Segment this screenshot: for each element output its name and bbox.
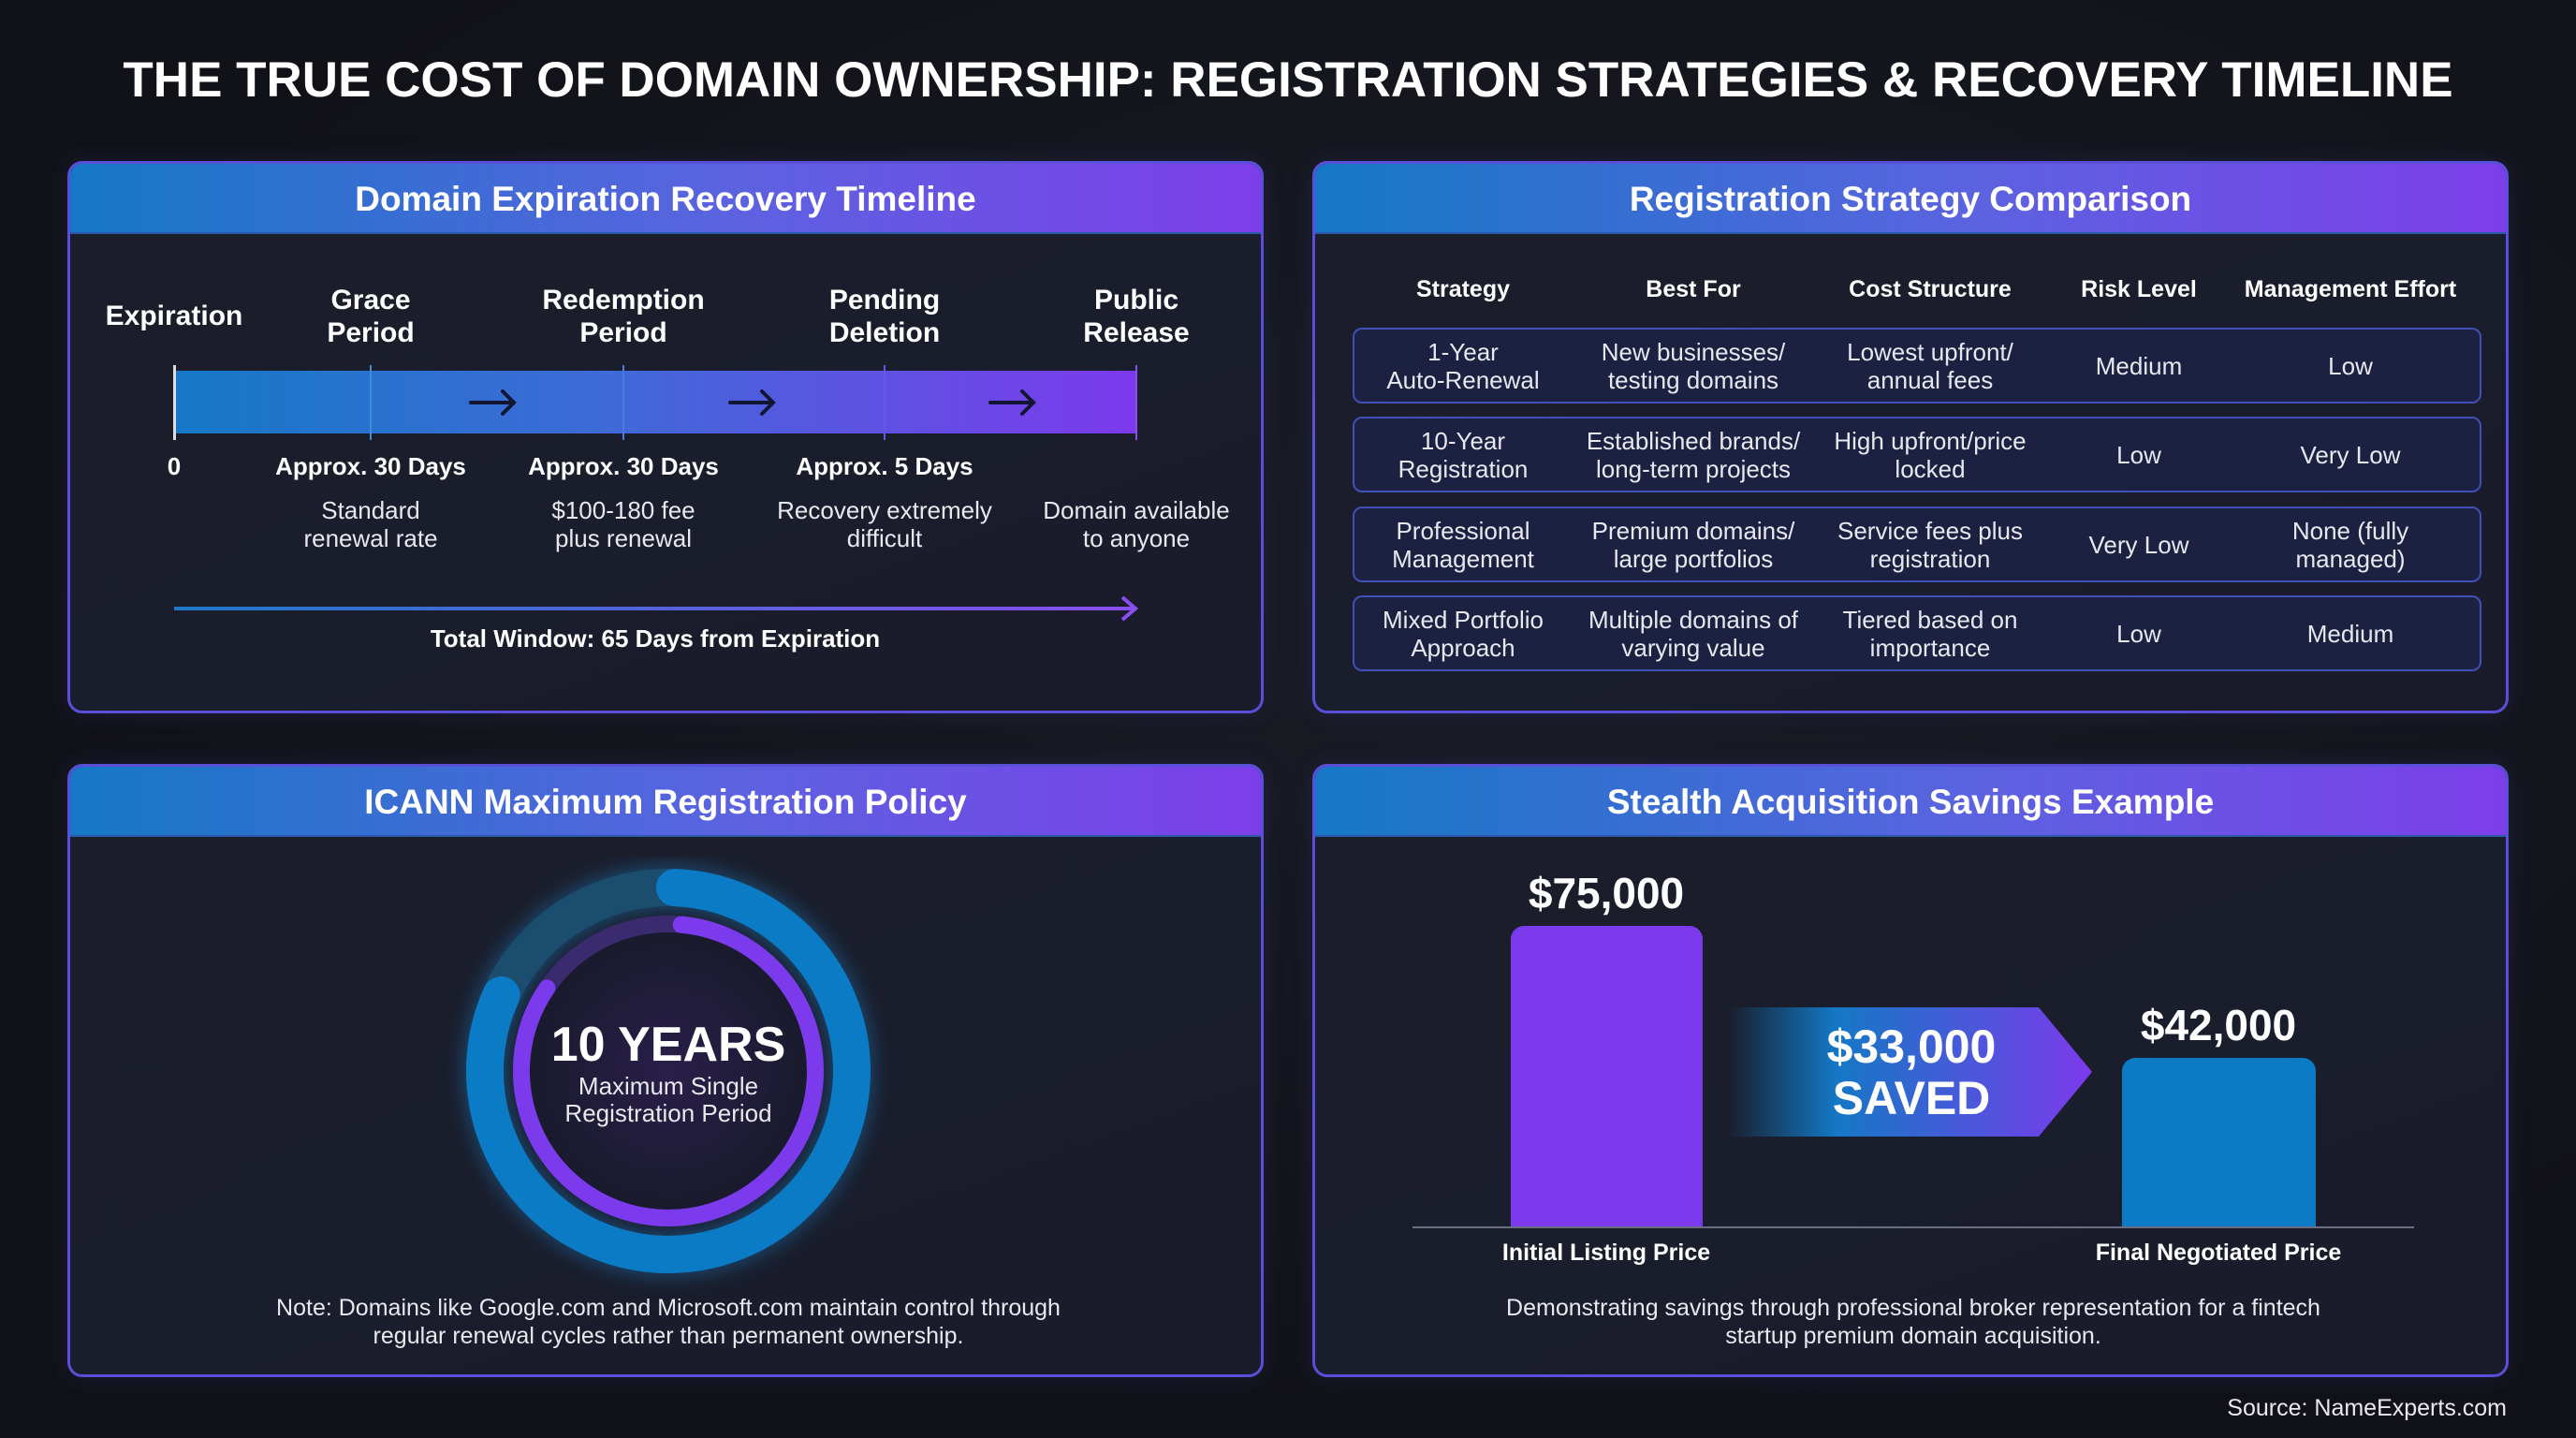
durations: Approx. 5 Days [796, 452, 973, 480]
donut center text: 10 YEARS [551, 1018, 785, 1072]
title: THE TRUE COST OF DOMAIN OWNERSHIP: REGISTRATION STRATEGIES & RECOVERY TIMELINE [123, 52, 2453, 108]
stage labels [106, 285, 1190, 348]
stage labels: Redemption [542, 285, 705, 315]
row: professional [1353, 506, 2481, 582]
heading: strategy [1315, 164, 2506, 234]
row: 10-year: locked [1895, 455, 1966, 483]
heading: timeline [70, 164, 1261, 234]
row: 10-year: Low [2116, 441, 2161, 469]
table header: Strategy [1416, 276, 1510, 302]
heading: ICANN: ICANN Maximum Registration Policy [364, 783, 967, 821]
tick marks [173, 365, 1137, 440]
row: 10-year: High upfront/price [1834, 427, 2027, 455]
row: 1-year: Medium [2096, 352, 2182, 380]
row: mixed: varying value [1621, 634, 1765, 662]
descriptions: difficult [847, 524, 922, 552]
bar labels [1502, 1240, 2341, 1266]
table header: Best For [1646, 276, 1741, 302]
row: professional: Service fees plus [1837, 517, 2023, 545]
row: 1-year: annual fees [1867, 366, 1993, 394]
heading: timeline: Domain Expiration Recovery Timeline [355, 180, 976, 218]
row: 1-year: 1-Year [1427, 338, 1499, 366]
durations: Approx. 30 Days [528, 452, 719, 480]
row: 10-year: Established brands/ [1587, 427, 1800, 455]
value: 42000: $42,000 [2141, 1001, 2296, 1049]
caption [1506, 1295, 2320, 1349]
panel: ICANN policy [67, 764, 1264, 1377]
total window text: Total Window: 65 Days from Expiration [431, 624, 880, 653]
row: 10-year: 10-Year [1421, 427, 1505, 455]
panel: stealth acquisition savings [1312, 764, 2509, 1377]
heading: savings [1315, 767, 2506, 837]
donut center text: Maximum Single [578, 1072, 758, 1100]
row: 1-year: Auto-Renewal [1386, 366, 1540, 394]
donut chart [453, 856, 884, 1286]
value: 75000: $75,000 [1529, 869, 1684, 917]
table header: Risk Level [2081, 276, 2197, 302]
timeline bar [174, 371, 1136, 433]
row: 10-year: Registration [1398, 455, 1528, 483]
row: mixed: Medium [2307, 620, 2393, 648]
stage labels: Period [579, 317, 667, 348]
descriptions: Recovery extremely [777, 496, 992, 524]
stage labels: Deletion [829, 317, 940, 348]
durations: 0 [168, 452, 181, 480]
heading: savings: Stealth Acquisition Savings Example [1607, 783, 2214, 821]
source: Source: NameExperts.com [2227, 1395, 2507, 1421]
heading: strategy: Registration Strategy Comparison [1630, 180, 2191, 218]
descriptions: to anyone [1083, 524, 1190, 552]
stage labels: Public [1094, 285, 1178, 315]
row: professional: large portfolios [1614, 545, 1773, 573]
bar labels: Final Negotiated Price [2096, 1240, 2341, 1266]
row: professional: Premium domains/ [1592, 517, 1794, 545]
descriptions: renewal rate [303, 524, 438, 552]
table header [1416, 276, 2456, 302]
row: professional: Management [1392, 545, 1534, 573]
stage labels: Expiration [106, 301, 242, 331]
savings text: $33,000 [1827, 1020, 1996, 1073]
row: 1-year [1353, 328, 2481, 404]
row: 1-year: testing domains [1608, 366, 1778, 394]
donut center text [551, 1018, 785, 1127]
note: Note: Domains like Google.com and Microsoft.com maintain control through [276, 1295, 1061, 1321]
stage labels: Pending [829, 285, 940, 315]
note [276, 1295, 1061, 1349]
row: professional: managed) [2295, 545, 2406, 573]
durations: Approx. 30 Days [275, 452, 466, 480]
donut center text: Registration Period [564, 1099, 772, 1127]
row: mixed: Low [2116, 620, 2161, 648]
row: 1-year: Lowest upfront/ [1847, 338, 2013, 366]
row: mixed: importance [1870, 634, 1990, 662]
caption: startup premium domain acquisition. [1725, 1323, 2101, 1349]
descriptions [303, 496, 1230, 552]
table header: Management Effort [2245, 276, 2456, 302]
savings text: SAVED [1833, 1072, 1990, 1124]
panel: registration strategy comparison [1312, 161, 2509, 713]
row: professional: Very Low [2089, 531, 2188, 559]
bar: initial listing [1511, 926, 1703, 1227]
row: 10-year [1353, 417, 2481, 492]
note: regular renewal cycles rather than permanent ownership. [373, 1323, 963, 1349]
row: mixed: Approach [1411, 634, 1515, 662]
row: 1-year: New businesses/ [1602, 338, 1785, 366]
row: professional: Professional [1396, 517, 1530, 545]
caption: Demonstrating savings through professional broker representation for a fintech [1506, 1295, 2320, 1321]
stage labels: Release [1083, 317, 1190, 348]
row: mixed: Multiple domains of [1588, 606, 1798, 634]
stage labels: Grace [330, 285, 411, 315]
total window arrow [174, 595, 1138, 622]
row: 10-year: long-term projects [1596, 455, 1791, 483]
descriptions: Domain available [1043, 496, 1230, 524]
row: mixed: Tiered based on [1843, 606, 2017, 634]
arrows in bar [469, 389, 1036, 416]
row: mixed: Mixed Portfolio [1383, 606, 1544, 634]
row: 10-year: Very Low [2301, 441, 2400, 469]
heading: ICANN [70, 767, 1261, 837]
baseline [1412, 1226, 2414, 1228]
savings text [1827, 1020, 1996, 1124]
row: professional: None (fully [2292, 517, 2408, 545]
row: professional: registration [1870, 545, 1990, 573]
stage labels: Period [327, 317, 415, 348]
row: mixed [1353, 595, 2481, 671]
bar labels: Initial Listing Price [1502, 1240, 1710, 1266]
savings arrow [1734, 1007, 2092, 1137]
panel: recovery timeline [67, 161, 1264, 713]
table header: Cost Structure [1849, 276, 2012, 302]
descriptions: plus renewal [555, 524, 692, 552]
descriptions: Standard [321, 496, 420, 524]
descriptions: $100-180 fee [551, 496, 695, 524]
row: 1-year: Low [2328, 352, 2373, 380]
bar: final negotiated [2122, 1058, 2316, 1227]
durations [168, 452, 973, 480]
